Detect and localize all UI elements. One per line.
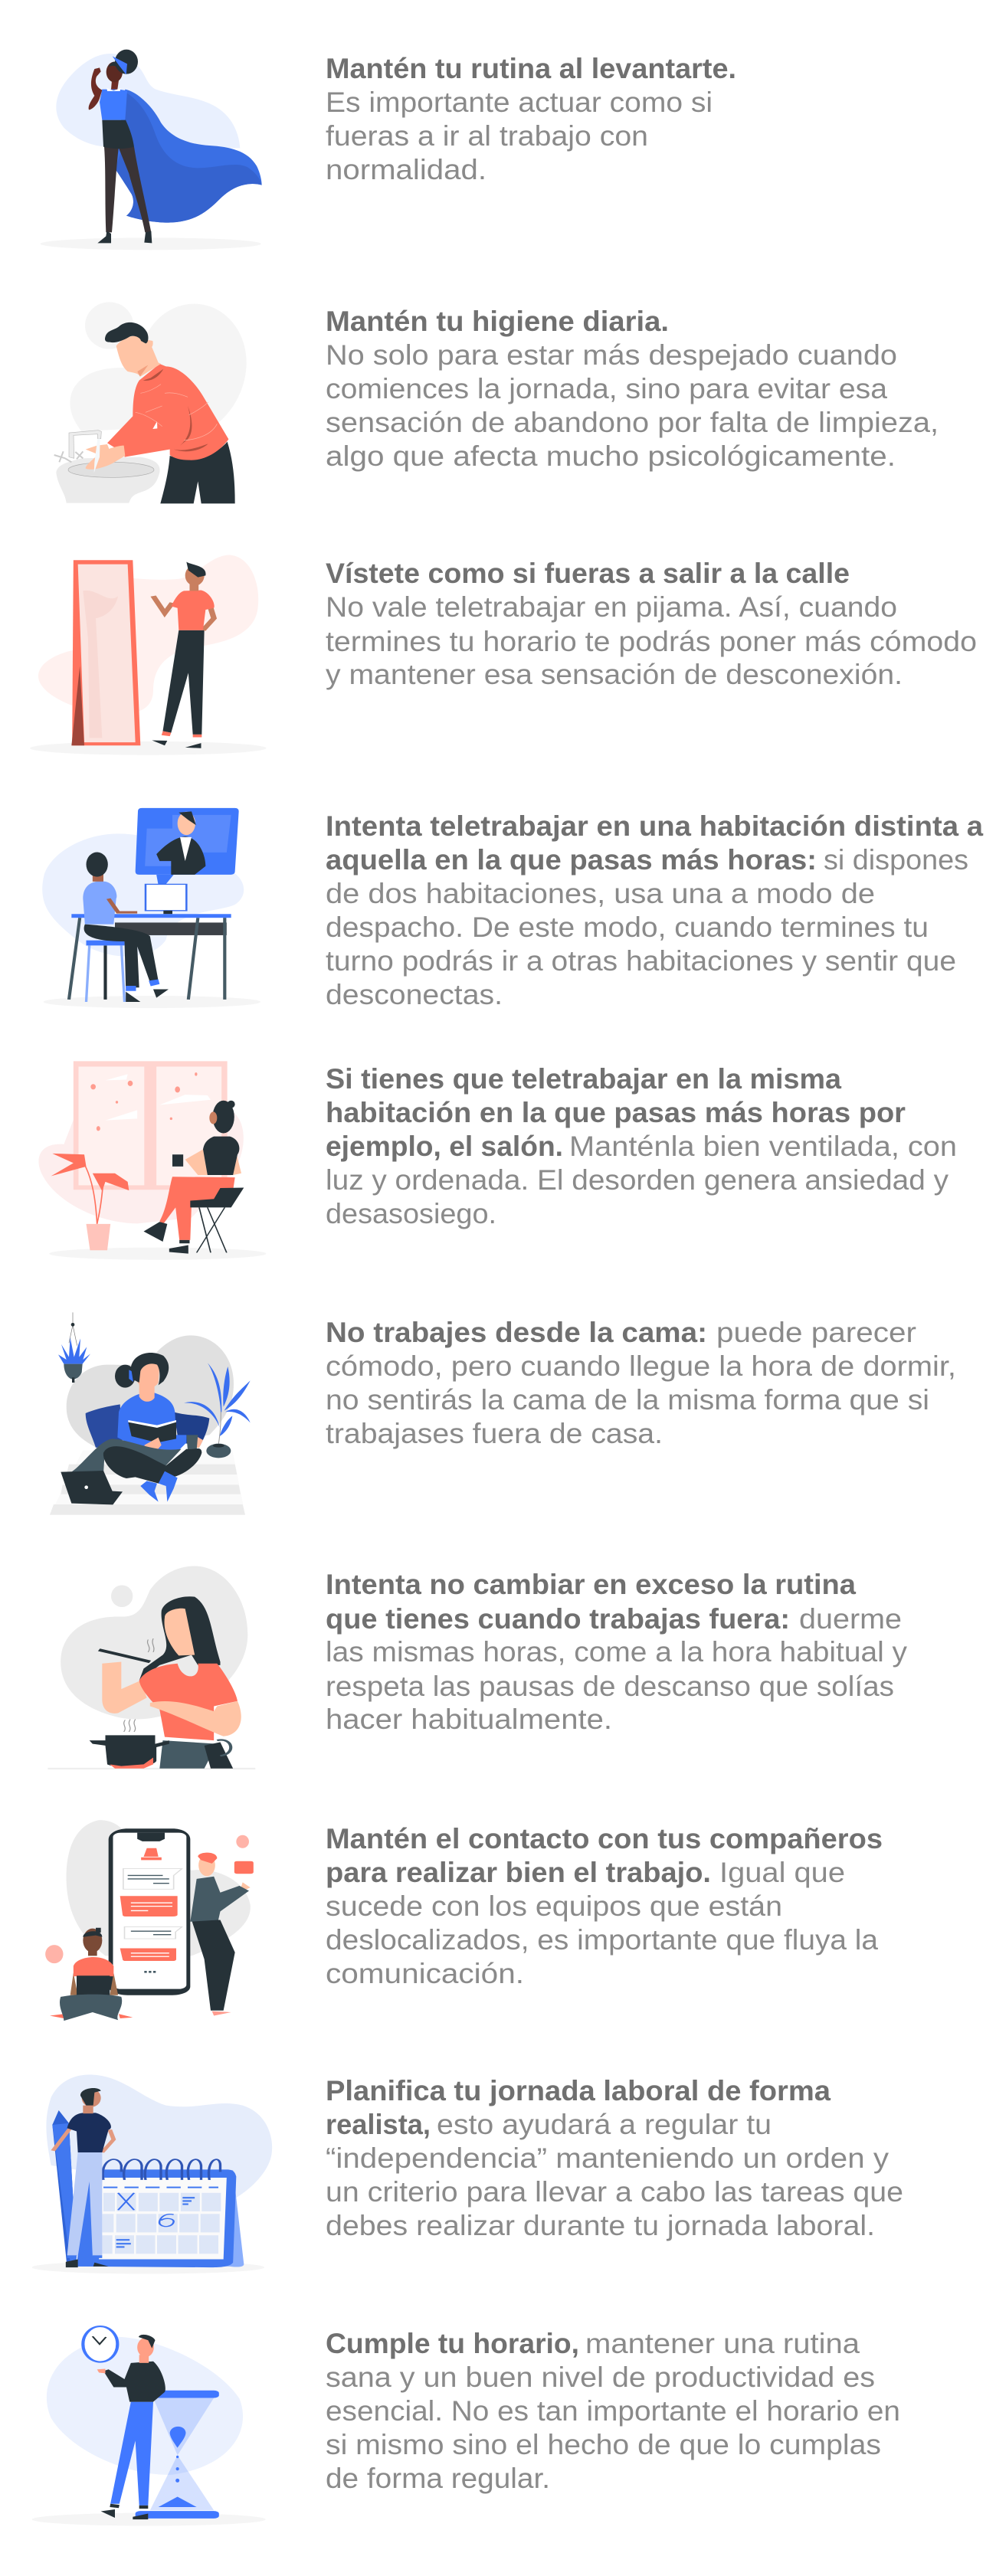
text block: misma habitación body: Manténla bien ventilada, con	[569, 1131, 957, 1162]
panel: misma habitación	[38, 1061, 957, 1260]
panel: cumple tu horario	[32, 2326, 900, 2526]
heading: Intenta teletrabajar en una habitación	[326, 810, 983, 876]
text block: rutina body: duerme	[799, 1603, 902, 1635]
panel: rutina cuando trabajas fuera	[48, 1566, 908, 1769]
text block: vístete body: termines tu horario te podrás poner más cómodo	[326, 626, 977, 657]
text block: planifica body: debes realizar durante tu jornada laboral.	[326, 2210, 875, 2241]
text block: planifica body: un criterio para llevar a cabo las tareas que	[326, 2176, 903, 2208]
illustration: man with calendar and pencil	[32, 2074, 272, 2274]
text block: habitación body: turno podrás ir a otras habitaciones y sentir que	[326, 945, 956, 977]
heading: Planifica tu jornada	[326, 2075, 831, 2140]
text block: rutina body: hacer habitualmente.	[326, 1704, 612, 1735]
heading: Intenta no cambiar en exceso: Intenta no cambiar en exceso la rutina	[326, 1569, 856, 1600]
text block: misma habitación body: luz y ordenada. El desorden genera ansiedad y	[326, 1164, 949, 1196]
panel: planifica	[32, 2074, 903, 2274]
text block: cama body: trabajases fuera de casa.	[326, 1418, 663, 1449]
text block: horario body	[326, 2328, 900, 2494]
text block: misma habitación body: desasosiego.	[326, 1198, 496, 1229]
heading: Intenta teletrabajar en una habitación: Intenta teletrabajar en una habitación distinta a	[326, 810, 983, 842]
illustration: man with clock and hourglass	[32, 2326, 266, 2526]
text block: cama body	[326, 1317, 956, 1449]
text block: cama body: cómodo, pero cuando llegue la hora de dormir,	[326, 1350, 956, 1382]
text block: vístete body: No vale teletrabajar en pijama. Así, cuando	[326, 591, 897, 623]
text block: higiene body: No solo para estar más despejado cuando	[326, 339, 897, 371]
illustration: woman cooking	[48, 1566, 255, 1769]
panel: higiene diaria	[54, 302, 939, 503]
text block: contacto body: sucede con los equipos que están	[326, 1890, 782, 1922]
panel: no trabajes desde la cama	[50, 1312, 956, 1515]
text block: cama body: puede parecer	[716, 1317, 916, 1348]
text block: planifica body: “independencia” manteniendo un orden y	[326, 2142, 890, 2174]
text block: rutina body: las mismas horas, come a la hora habitual y	[326, 1636, 908, 1668]
text block: higiene body: algo que afecta mucho psicológicamente.	[326, 440, 896, 472]
text block: planifica body: esto ayudará a regular tu	[437, 2109, 772, 2140]
text block: misma habitación body	[326, 1131, 957, 1229]
text block: horario body: de forma regular.	[326, 2463, 550, 2494]
text block: habitación body	[326, 844, 968, 1010]
text block: habitación body: de dos habitaciones, usa una a modo de	[326, 878, 875, 909]
illustration: people with giant phone	[45, 1820, 254, 2021]
heading: Vístete como si fueras a salir a la calle: Vístete como si fueras a salir a la calle	[326, 558, 850, 589]
text block: horario body: mantener una rutina	[585, 2328, 860, 2359]
text block: contacto body: deslocalizados, es importante que fluya la	[326, 1924, 878, 1956]
heading: Planifica tu jornada: realista,	[326, 2109, 431, 2140]
text block: rutina body: respeta las pausas de descanso que solías	[326, 1671, 894, 1702]
text block: rutina body: Es importante actuar como si	[326, 87, 713, 118]
text block: higiene body: sensación de abandono por falta de limpieza,	[326, 407, 939, 438]
heading: No trabajes desde la cama: No trabajes desde la cama:	[326, 1317, 707, 1348]
illustration: woman reading with laptop	[50, 1312, 251, 1515]
illustration: video call at desk	[42, 808, 260, 1008]
panel: rutina al levantarte	[41, 50, 736, 250]
heading: Intenta no cambiar en exceso	[326, 1569, 856, 1635]
heading: Cumple tu horario: Cumple tu horario,	[326, 2328, 579, 2359]
text block: planifica body	[326, 2109, 903, 2241]
heading: Mantén tu higiene diaria: Mantén tu higiene diaria.	[326, 306, 669, 337]
heading: Mantén el contacto: Mantén el contacto con tus compañeros	[326, 1823, 883, 1854]
heading: Si tienes que teletrabajar: Si tienes que teletrabajar en la misma	[326, 1063, 841, 1095]
heading: Mantén tu rutina al levantarte: Mantén tu rutina al levantarte.	[326, 53, 736, 84]
text block: habitación body: despacho. De este modo, cuando termines tu	[326, 912, 929, 943]
heading: Si tienes que teletrabajar: ejemplo, el salón.	[326, 1131, 563, 1162]
text block: horario body: si mismo sino el hecho de que lo cumplas	[326, 2429, 881, 2460]
heading: Planifica tu jornada: Planifica tu jornada laboral de forma	[326, 2075, 831, 2106]
panel: habitación distinta	[42, 808, 983, 1010]
panel: vístete	[30, 555, 977, 755]
text block: vístete body: y mantener esa sensación de desconexión.	[326, 659, 903, 690]
heading: Si tienes que teletrabajar: habitación en la que pasas más horas por	[326, 1097, 906, 1128]
text block: higiene body: comiences la jornada, sino para evitar esa	[326, 373, 887, 404]
text block: cama body: no sentirás la cama de la misma forma que si	[326, 1384, 929, 1416]
text block: contacto body	[326, 1857, 878, 1989]
illustration: woman with cape	[41, 50, 262, 250]
heading: Si tienes que teletrabajar	[326, 1063, 906, 1162]
text block: rutina body: normalidad.	[326, 154, 487, 185]
heading: Mantén el contacto	[326, 1823, 883, 1888]
illustration: man at mirror	[30, 555, 266, 755]
text block: rutina body: fueras a ir al trabajo con	[326, 120, 648, 152]
illustration: man washing hands	[54, 302, 247, 503]
text block: rutina body	[326, 87, 713, 185]
text block: rutina body	[326, 1603, 908, 1735]
illustration: woman at window with plant	[38, 1061, 266, 1260]
text block: habitación body: si dispones	[824, 844, 968, 876]
text block: higiene body	[326, 339, 939, 472]
text block: horario body: sana y un buen nivel de productividad es	[326, 2362, 875, 2393]
text block: contacto body: comunicación.	[326, 1958, 524, 1989]
heading: Intenta teletrabajar en una habitación: aquella en la que pasas más horas:	[326, 844, 817, 876]
heading: Mantén el contacto: para realizar bien el trabajo.	[326, 1857, 711, 1888]
heading: Intenta no cambiar en exceso: que tienes cuando trabajas fuera:	[326, 1603, 790, 1635]
text block: contacto body: Igual que	[719, 1857, 845, 1888]
text block: vístete body	[326, 591, 977, 690]
panel: contacto con compañeros	[45, 1820, 883, 2021]
text block: habitación body: desconectas.	[326, 979, 503, 1010]
text block: horario body: esencial. No es tan importante el horario en	[326, 2395, 900, 2427]
